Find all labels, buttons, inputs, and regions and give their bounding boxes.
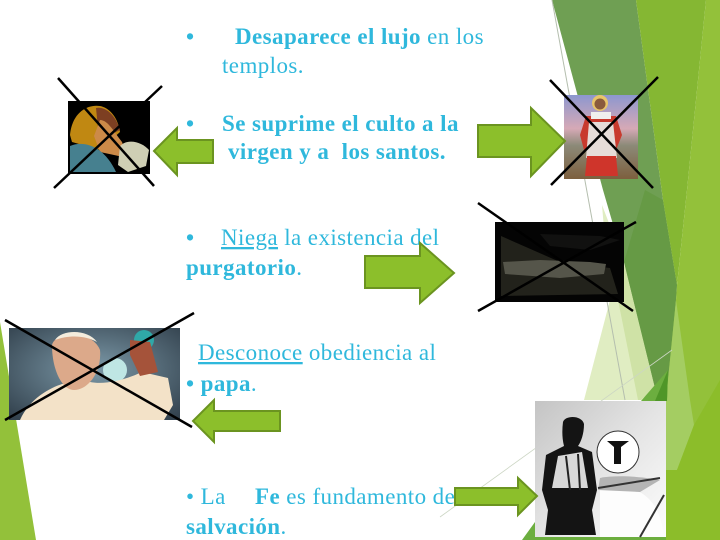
image: saint crossed out [550,77,658,188]
image: pope crossed out [5,313,194,427]
image: kneeling man before Christ [535,401,666,537]
text: bullet 3: Niega la existencia del [221,225,440,250]
arrow: right toward kneeling man [455,478,537,515]
arrow: left toward Madonna [154,128,213,175]
text: bullet 4 [186,340,436,396]
text: bullet 5: • La [186,484,226,509]
text: bullet 2 [186,111,459,164]
text: bullet 1: • [186,24,194,49]
text: bullet 3 [186,225,440,280]
text: bullet 4: Desconoce obediencia al [198,340,436,365]
arrow: right toward saint [478,108,565,176]
text: bullet 2: Se suprime el culto a la [222,111,459,136]
background: right green shapes [440,0,720,540]
text: bullet 5: salvación. [186,514,287,539]
text: bullet 1: Desaparece el lujo en los [235,24,484,49]
text: bullet 3: • [186,225,194,250]
arrow: right toward purgatory [365,243,454,303]
text: bullet 3: purgatorio. [186,255,302,280]
text: bullet 2: virgen y a los santos. [228,139,446,164]
text: bullet 5 [186,484,455,539]
image: purgatory engraving crossed out [478,203,636,311]
image: Madonna and child crossed out [54,78,162,188]
arrow: left toward pope [193,400,280,442]
text: bullet 1: templos. [222,53,304,78]
text: bullet 2: • [186,111,194,136]
text: bullet 4: • papa. [186,371,257,396]
text: bullet 5: Fe es fundamento de [255,484,455,509]
background: left green triangle [0,322,36,540]
text: bullet 1 [186,24,484,78]
